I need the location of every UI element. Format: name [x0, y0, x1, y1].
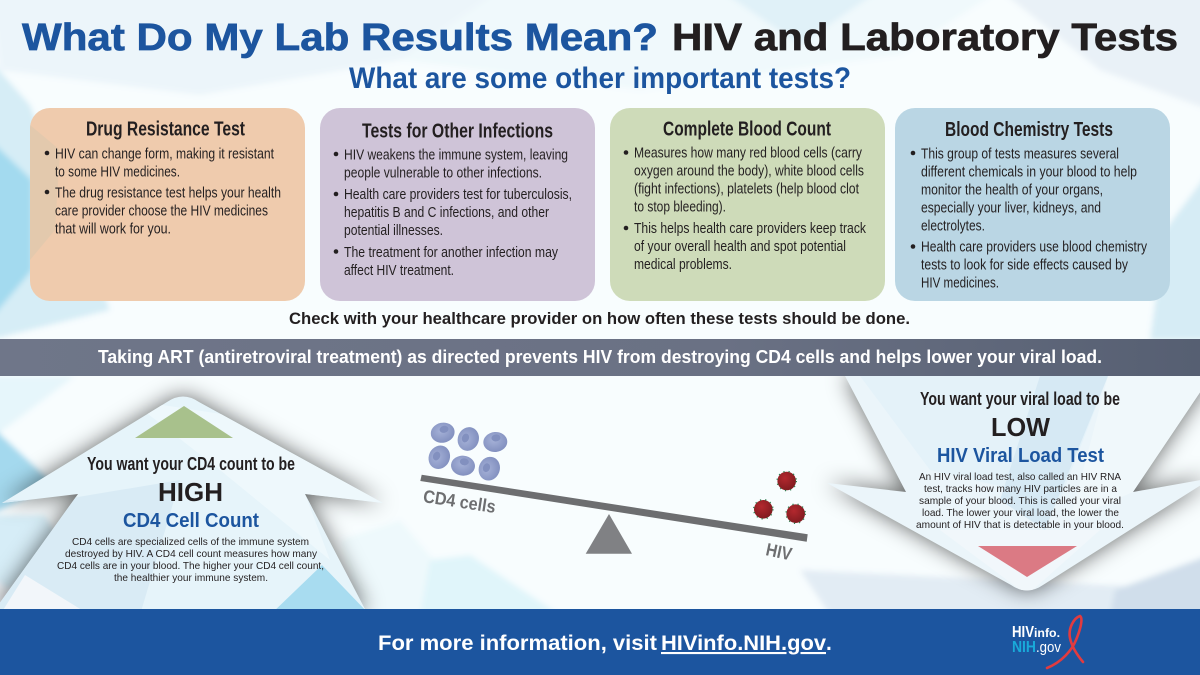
bullet list: other infections: The treatment for another infection may	[344, 244, 558, 261]
description: viral load test: An HIV viral load test, also called an HIV RNA	[919, 471, 1121, 483]
panel: drug resistance test	[30, 108, 305, 301]
bullet list: other infections: people vulnerable to other infections.	[344, 164, 542, 182]
description: viral load test: sample of your blood. This is called your viral	[919, 495, 1121, 507]
description: CD4 cell count: CD4 cells are in your blood. The higher your CD4 cell count,	[57, 560, 324, 572]
description: CD4 cell count: the healthier your immune system.	[114, 572, 268, 584]
bullet list: other infections	[334, 146, 572, 279]
bullet list: drug resistance test: The drug resistance test helps your health	[55, 184, 281, 202]
icon: HIV particles	[754, 471, 805, 523]
logo: HIVinfo.NIH.gov with red ribbon: info.	[1034, 626, 1060, 640]
chart: balance scale	[420, 420, 808, 564]
bullet list: drug resistance test: care provider choose the HIV medicines	[55, 202, 268, 220]
footer	[0, 609, 1200, 675]
bullet list: other infections: affect HIV treatment.	[344, 262, 454, 279]
note: check with your provider: Check with your healthcare provider on how often these tests should be done.	[289, 309, 910, 328]
panel: complete blood count	[610, 108, 885, 301]
bullet list: other infections: hepatitis B and C infections, and other	[344, 204, 549, 221]
description: CD4 cell count: destroyed by HIV. A CD4 cell count measures how many	[65, 548, 318, 560]
panel: down arrow viral load	[820, 370, 1200, 600]
title	[22, 17, 1178, 59]
scale fulcrum	[586, 514, 632, 554]
bullet list: complete blood count: (fight infections), platelets (help blood clot	[634, 180, 860, 198]
icon: red down triangle	[978, 546, 1077, 577]
description: CD4 cell count: CD4 cells are specialized cells of the immune system	[72, 536, 309, 548]
scale beam	[420, 475, 808, 542]
footer call to action: For more information, visit	[378, 632, 657, 655]
description: viral load test: test, tracks how many HIV particles are in a	[924, 483, 1117, 495]
panel: blood chemistry tests	[895, 108, 1170, 301]
bullet list: complete blood count: Measures how many red blood cells (carry	[634, 144, 862, 162]
heading: LOW: LOW	[991, 412, 1050, 442]
bullet list: drug resistance test	[45, 146, 281, 238]
bullet list: blood chemistry tests: tests to look for side effects caused by	[921, 256, 1128, 274]
heading: blood chemistry tests: Blood Chemistry Tests	[945, 119, 1113, 141]
bullet list: complete blood count	[624, 144, 866, 273]
label: HIV: HIV	[764, 539, 794, 564]
bullet list: blood chemistry tests: Health care providers use blood chemistry	[921, 238, 1147, 256]
bullet list: complete blood count: oxygen around the body), white blood cells	[634, 162, 864, 180]
bullet list: other infections: potential illnesses.	[344, 222, 443, 239]
icon: CD4 cells	[425, 420, 508, 484]
bullet list: other infections: Health care providers test for tuberculosis,	[344, 186, 572, 203]
bullet list: drug resistance test: that will work for you.	[55, 220, 171, 238]
description: viral load test: amount of HIV that is detectable in your blood.	[916, 519, 1124, 531]
banner: taking ART: Taking ART (antiretroviral treatment) as directed prevents HIV from destroying CD4 cells and helps lower your viral load.	[98, 347, 1102, 367]
lead text: viral load low: You want your viral load to be	[920, 389, 1120, 409]
bullet list: other infections: HIV weakens the immune system, leaving	[344, 146, 568, 164]
bullet list: complete blood count: medical problems.	[634, 256, 732, 273]
bullet list: blood chemistry tests: different chemicals in your blood to help	[921, 164, 1137, 180]
logo: HIVinfo.NIH.gov with red ribbon: .gov	[1036, 639, 1061, 656]
logo: HIVinfo.NIH.gov with red ribbon: HIV	[1012, 624, 1034, 641]
bullet list: blood chemistry tests: especially your liver, kidneys, and	[921, 200, 1101, 216]
description: viral load test	[916, 471, 1124, 531]
description: CD4 cell count	[57, 536, 324, 584]
bullet list: blood chemistry tests	[911, 146, 1147, 292]
heading: drug resistance test: Drug Resistance Test	[86, 118, 245, 140]
subtitle: What are some other important tests?	[349, 62, 851, 95]
logo: HIVinfo.NIH.gov with red ribbon	[1012, 616, 1083, 668]
title: What Do My Lab Results Mean?	[22, 17, 658, 59]
bullet list: complete blood count: to stop bleeding).	[634, 198, 726, 216]
footer call to action	[378, 632, 832, 655]
heading: HIGH: HIGH	[158, 477, 223, 507]
icon: green up triangle	[135, 406, 233, 438]
bullet list: blood chemistry tests: electrolytes.	[921, 218, 985, 234]
footer call to action: .	[826, 632, 832, 655]
lead text: CD4 high: You want your CD4 count to be	[87, 454, 295, 474]
heading: complete blood count: Complete Blood Count	[663, 118, 831, 140]
label: CD4 cells: CD4 cells	[422, 486, 497, 517]
heading: HIV viral load test: HIV Viral Load Test	[937, 445, 1104, 467]
bullet list: complete blood count: of your overall health and spot potential	[634, 238, 846, 255]
logo: HIVinfo.NIH.gov with red ribbon: NIH	[1012, 639, 1036, 656]
title: HIV and Laboratory Tests	[672, 17, 1178, 59]
bullet list: blood chemistry tests: monitor the health of your organs,	[921, 182, 1103, 198]
bullet list: blood chemistry tests: This group of tests measures several	[921, 146, 1119, 162]
bullet list: complete blood count: This helps health care providers keep track	[634, 220, 866, 237]
bullet list: drug resistance test: to some HIV medicines.	[55, 164, 180, 180]
banner: taking ART	[0, 339, 1200, 376]
bullet list: blood chemistry tests: HIV medicines.	[921, 274, 999, 292]
description: viral load test: load. The lower your viral load, the lower the	[922, 507, 1119, 519]
bullet list: drug resistance test: HIV can change form, making it resistant	[55, 146, 275, 162]
heading: tests for other infections: Tests for Other Infections	[362, 120, 553, 142]
footer call to action: HIVinfo.NIH.gov	[661, 632, 826, 655]
panel: tests for other infections	[320, 108, 595, 301]
heading: CD4 cell count: CD4 Cell Count	[123, 510, 259, 532]
panel: up arrow CD4	[0, 385, 390, 615]
